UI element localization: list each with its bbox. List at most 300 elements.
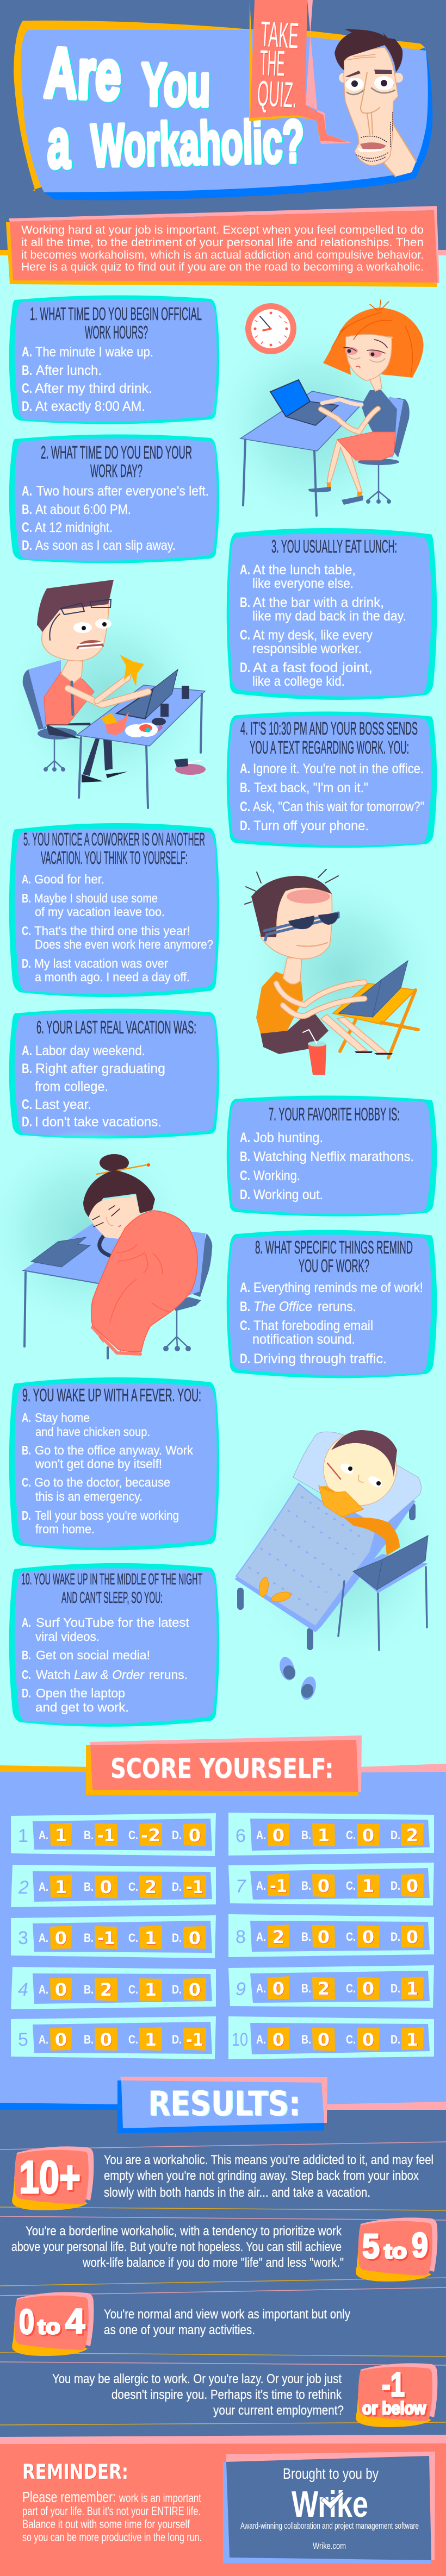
take the quiz tab: TAKE (259, 14, 300, 56)
score row 3: D. (172, 1931, 182, 1945)
score row 3: -1 (97, 1928, 115, 1948)
score row 3: C. (128, 1931, 138, 1945)
reminder heading: REMINDER: (22, 2460, 128, 2484)
sponsor panel (223, 2452, 435, 2564)
answers: A. (22, 1043, 32, 1058)
answers: That foreboding email (253, 1318, 373, 1333)
take the quiz tab (249, 0, 351, 144)
score row 6: 0 (362, 1825, 374, 1846)
badge text: 5 (362, 2227, 380, 2266)
answers: The minute I wake up. (35, 344, 153, 360)
intro panel (6, 206, 439, 287)
result text (104, 2307, 350, 2337)
badge text: to (384, 2240, 407, 2263)
score row 6: 6 (236, 1826, 246, 1846)
answers: Working out. (253, 1187, 323, 1202)
answers: C. (22, 520, 32, 535)
answers: That's the third one this year! (34, 924, 190, 938)
answers: Everything reminds me of work! (253, 1280, 423, 1295)
score row 10: 0 (272, 2029, 284, 2050)
answers: B. (22, 502, 32, 517)
heading (41, 442, 192, 481)
url: Wrike.com (313, 2541, 346, 2551)
answers: Law & Order (74, 1668, 145, 1682)
score row 8: D. (391, 1930, 400, 1944)
score row 3: 3 (18, 1928, 28, 1948)
answers: B. (240, 1149, 250, 1164)
badge text (362, 2366, 426, 2418)
score row 7: B. (301, 1879, 311, 1892)
badge text: 10+ (19, 2152, 80, 2203)
score row 2: A. (39, 1880, 48, 1894)
answers: B. (22, 891, 31, 905)
laptop (270, 380, 338, 425)
answers: Good for her. (34, 872, 104, 886)
result text: You're a borderline workaholic, with a tendency to prioritize work (26, 2224, 342, 2239)
score row 8 (228, 1914, 434, 1957)
answers (240, 761, 424, 833)
score row 9: 1 (406, 1978, 418, 1999)
result text: You're normal and view work as important but only (104, 2307, 350, 2322)
reminder text: part of your life. But it's not your ENTIRE life. (22, 2504, 201, 2518)
badge (12, 2292, 94, 2356)
socks (258, 1577, 292, 1603)
desk (77, 685, 205, 808)
result text (52, 2372, 344, 2418)
score row 4: C. (128, 1983, 138, 1996)
laptop (338, 961, 408, 1017)
take the quiz tab: QUIZ. (256, 73, 298, 115)
question 8 panel (227, 1230, 437, 1378)
brought to you by: Brought to you by (283, 2465, 379, 2482)
score row 3 (11, 1915, 216, 1958)
results heading (117, 2077, 327, 2133)
answers: D. (22, 399, 32, 414)
answers: viral videos. (35, 1629, 100, 1644)
score row 5: 0 (100, 2029, 112, 2050)
score row 1: -1 (97, 1825, 115, 1846)
score row 6: B. (301, 1828, 311, 1842)
answers: C. (22, 924, 31, 938)
badge text: 9 (412, 2226, 428, 2265)
answers (22, 344, 153, 414)
answers: won't get done by itself! (35, 1457, 162, 1471)
answers: Ignore it. You're not in the office. (253, 761, 424, 776)
badge text: to (38, 2316, 60, 2339)
bed frame (234, 1483, 416, 1647)
illustration: woman asleep at desk under shawl (0, 1129, 212, 1358)
answers (22, 484, 209, 553)
score row 10: B. (301, 2033, 311, 2046)
answers: Two hours after everyone's left. (36, 484, 209, 499)
score row 3: B. (84, 1931, 94, 1945)
score row 9: C. (346, 1982, 356, 1995)
reminder text (22, 2489, 202, 2544)
score row 7: 7 (236, 1876, 246, 1897)
answers: After my third drink. (35, 381, 152, 396)
score row 9: 9 (236, 1979, 246, 2000)
score row 4: 2 (100, 1979, 112, 2000)
score row 5: D. (172, 2033, 182, 2046)
intro text: Working hard at your job is important. Except when you feel compelled to do (21, 223, 424, 236)
answers: A. (22, 1615, 31, 1629)
answers: As soon as I can slip away. (35, 538, 176, 553)
score row 2 (11, 1865, 216, 1907)
title (43, 33, 305, 183)
heading: AND CAN'T SLEEP, SO YOU: (61, 1589, 163, 1607)
score row 9: 2 (318, 1978, 330, 1999)
answers: A. (22, 484, 32, 499)
score row 10: 0 (362, 2029, 374, 2050)
question 5 panel (9, 823, 219, 997)
shawl (91, 1211, 197, 1356)
heading (21, 1571, 202, 1607)
score row 6: A. (256, 1828, 266, 1842)
answers: D. (240, 660, 250, 675)
shirt (44, 672, 94, 724)
reminder text: so you can be more productive in the long run. (22, 2530, 202, 2544)
question 5 panel: VACATION. YOU THINK TO YOURSELF: (41, 848, 188, 868)
score row 10: D. (391, 2033, 400, 2046)
vest (256, 972, 303, 1033)
take the quiz tab: THE (259, 42, 286, 84)
illustration: clock and tired woman at desk (209, 300, 423, 527)
score row 8: C. (346, 1930, 356, 1944)
answers: C. (240, 628, 250, 643)
title: Are (43, 33, 122, 115)
answers: My last vacation was over (34, 956, 168, 970)
head and arms (37, 580, 148, 714)
result text: doesn't inspire you. Perhaps it's time to rethink (112, 2387, 342, 2402)
answers: I don't take vacations. (35, 1114, 162, 1130)
result text (104, 2153, 433, 2200)
answers: D. (240, 818, 250, 833)
score row 1: A. (39, 1828, 48, 1842)
score row 8: 0 (406, 1927, 418, 1947)
answers: reruns. (318, 1299, 356, 1314)
score row 6: D. (391, 1828, 400, 1842)
heading: 1. WHAT TIME DO YOU BEGIN OFFICIAL (30, 304, 202, 324)
text: 5. YOU NOTICE A COWORKER IS ON ANOTHER (23, 829, 205, 849)
heading: 6. YOUR LAST REAL VACATION WAS: (36, 1017, 196, 1037)
question 9 panel (9, 1377, 219, 1550)
answers: At the lunch table, (253, 562, 356, 578)
legs (46, 723, 128, 782)
answers: C. (22, 1475, 31, 1489)
score row 10: A. (256, 2033, 266, 2046)
answers: Working. (253, 1168, 300, 1183)
head (313, 1421, 407, 1516)
question 3 panel (227, 528, 437, 700)
answers: Go to the doctor, because (34, 1475, 170, 1489)
heading: 9. YOU WAKE UP WITH A FEVER. YOU: (22, 1385, 201, 1405)
intro text (21, 223, 424, 273)
heading: 2. WHAT TIME DO YOU END YOUR (41, 442, 192, 462)
answers: A. (22, 344, 32, 360)
closed laptop (31, 1237, 90, 1267)
title: You (141, 51, 211, 119)
answers (22, 872, 213, 984)
illustration: tired man's head (334, 29, 416, 177)
answers: D. (22, 956, 31, 970)
answers: At 12 midnight. (35, 520, 113, 535)
answers: D. (22, 1508, 31, 1522)
scarf (319, 1486, 400, 1556)
blanket (236, 1483, 375, 1626)
answers: Stay home (35, 1411, 90, 1425)
heading (240, 718, 418, 757)
score row 5: -1 (186, 2029, 203, 2050)
score row 1: 1 (18, 1826, 28, 1846)
score row 10: 0 (318, 2029, 330, 2050)
score row 2: -1 (186, 1877, 203, 1897)
heading: WORK HOURS? (85, 322, 148, 342)
answers: Labor day weekend. (35, 1043, 145, 1058)
head, arms, drink (245, 869, 364, 1075)
answers: notification sound. (252, 1332, 355, 1347)
question 6 panel (9, 1008, 219, 1138)
badge (356, 2363, 437, 2427)
badge text (19, 2302, 85, 2341)
answers: At the bar with a drink, (253, 595, 384, 610)
answers: D. (240, 1187, 250, 1202)
score row 10: 10 (232, 2029, 248, 2050)
score row 9: 0 (272, 1978, 284, 1999)
answers: from college. (35, 1079, 108, 1094)
answers: like everyone else. (252, 576, 354, 591)
score row 4: 0 (189, 1979, 201, 2000)
score row 2: 1 (55, 1877, 67, 1897)
heading (30, 304, 202, 342)
woman (308, 300, 423, 505)
score row 1: B. (84, 1828, 94, 1842)
answers: C. (22, 381, 32, 396)
pillow (293, 1432, 421, 1528)
answers: B. (22, 363, 32, 378)
result: 10 plus (12, 2146, 433, 2210)
score row 2: C. (128, 1880, 138, 1894)
score row 1: D. (172, 1828, 182, 1842)
score row 7: 0 (406, 1876, 418, 1896)
score row 4: D. (172, 1983, 182, 1996)
illustration: sunburned man working on vacation (241, 869, 442, 1075)
answers: reruns. (149, 1668, 188, 1682)
score row 2: 2 (18, 1877, 29, 1898)
result: 5 to 9 (11, 2217, 437, 2282)
header speech bubble (14, 21, 432, 200)
answers: B. (240, 1299, 250, 1314)
score row 3: 1 (145, 1928, 157, 1948)
question 10 panel: 10. YOU WAKE UP IN THE MIDDLE OF THE NIGHT (21, 1571, 202, 1588)
answers: of my vacation leave too. (35, 905, 165, 919)
score yourself heading (86, 1735, 362, 1796)
sleeping face (89, 1195, 140, 1239)
score row 8: 0 (318, 1927, 330, 1947)
answers: A. (240, 761, 250, 776)
heading (23, 829, 205, 868)
answers: A. (22, 1411, 31, 1425)
answers: A. (240, 1130, 250, 1145)
answers: C. (240, 1318, 250, 1333)
score row 7: 0 (318, 1876, 330, 1896)
answers: Surf YouTube for the latest (36, 1615, 190, 1629)
score row 6 (228, 1813, 434, 1856)
question 4 panel (227, 712, 437, 848)
score row 7: 1 (362, 1876, 374, 1896)
result text: slowly with both hands in the air... and take a vacation. (104, 2185, 370, 2200)
answers: Watch (36, 1668, 71, 1682)
score row 3: 0 (189, 1928, 201, 1948)
hair and bun (83, 1154, 155, 1217)
score row 8: 8 (236, 1927, 246, 1947)
score row 5: 1 (145, 2029, 157, 2050)
answers: C. (22, 1668, 31, 1682)
score row 2: B. (84, 1880, 94, 1894)
score row 8: A. (256, 1930, 266, 1944)
question 1 panel (9, 295, 219, 424)
score row 9 (228, 1965, 434, 2008)
badge text: 4 (65, 2302, 85, 2341)
score row 2: D. (172, 1880, 182, 1894)
score row 6: 0 (272, 1825, 284, 1846)
score row 5: A. (39, 2033, 48, 2046)
score row 4: B. (84, 1983, 94, 1996)
score row 5: C. (128, 2033, 138, 2046)
icon: wall clock (245, 303, 296, 354)
answers (240, 1130, 414, 1202)
desk (240, 391, 364, 516)
score row 2: 2 (145, 1877, 157, 1897)
score row 7: A. (256, 1879, 266, 1892)
reminder text: Please remember: (22, 2489, 116, 2505)
answers: D. (240, 1351, 250, 1367)
score row 1: -2 (141, 1825, 160, 1846)
answers: A. (240, 1280, 250, 1295)
answers: B. (22, 1648, 31, 1662)
score row 4: A. (39, 1983, 48, 1996)
intro text: it all the time, to the detriment of your personal life and relationships. Then (21, 236, 424, 249)
score yourself heading: SCORE YOURSELF: (110, 1753, 333, 1784)
answers: C. (240, 1168, 250, 1183)
result: 0 to 4 (12, 2292, 350, 2356)
answers (240, 562, 406, 689)
reminder text: work is an important (119, 2491, 201, 2505)
score row 1: 1 (55, 1825, 67, 1846)
score row 7: -1 (270, 1876, 287, 1896)
lunch items on desk (101, 686, 189, 737)
score row 9: B. (301, 1982, 311, 1995)
score row 5: B. (84, 2033, 94, 2046)
score row 9: D. (391, 1982, 400, 1995)
desk and chair (23, 1224, 212, 1358)
answers: this is an emergency. (35, 1489, 143, 1503)
illustration: sick man in bed with laptop (234, 1421, 446, 1702)
badge (356, 2217, 437, 2282)
answers: A. (22, 872, 31, 886)
score row 6: 2 (406, 1825, 418, 1846)
answers: D. (22, 1114, 32, 1130)
answers: Maybe I should use some (34, 891, 158, 905)
result divider lines (0, 2142, 446, 2425)
answers: At a fast food joint, (253, 660, 373, 675)
answers: C. (240, 799, 250, 814)
score row 6: C. (346, 1828, 356, 1842)
answers: At my desk, like every (253, 628, 373, 643)
score row 5 (11, 2016, 216, 2059)
answers: Get on social media! (36, 1648, 150, 1662)
answers: Does she even work here anymore? (35, 937, 213, 951)
answers: Last year. (35, 1097, 91, 1112)
score row 4: 1 (145, 1979, 157, 2000)
score row 1 (11, 1813, 216, 1856)
spilled cup (174, 759, 206, 775)
answers (22, 1615, 190, 1714)
score row 9: 0 (362, 1978, 374, 1999)
result text: above your personal life. But you're not hopeless. You can still achieve (11, 2240, 342, 2254)
answers: B. (22, 1443, 31, 1457)
score row 7: D. (391, 1879, 400, 1892)
score row 9: A. (256, 1982, 266, 1995)
score row 10 (228, 2016, 434, 2059)
title: Workaholic? (90, 108, 305, 179)
heading: YOU OF WORK? (299, 1256, 369, 1276)
score row 4: 4 (18, 1979, 28, 2000)
score row 6: 1 (318, 1825, 330, 1846)
intro text: it becomes workaholism, which is an actual addiction and compulsive behavior. (21, 248, 424, 261)
intro text: Here is a quick quiz to find out if you are on the road to becoming a workaholic. (21, 260, 424, 273)
answers: Text back, "I'm on it." (254, 780, 368, 795)
answers: a month ago. I need a day off. (35, 970, 190, 984)
reminder text: Balance it out with some time for yourself (22, 2517, 190, 2531)
chair (358, 397, 410, 504)
score row 8: 0 (362, 1927, 374, 1947)
answers: D. (22, 1686, 31, 1700)
answers: C. (22, 1097, 32, 1112)
heading: WORK DAY? (90, 461, 143, 481)
question 2 panel (9, 434, 219, 563)
folding table (333, 983, 418, 1058)
badge text: -1 (382, 2366, 405, 2404)
answers: Open the laptop (36, 1686, 125, 1700)
answers: Turn off your phone. (253, 818, 369, 833)
result text (11, 2224, 344, 2270)
score row 7 (228, 1863, 434, 1906)
answers (240, 1280, 423, 1367)
answers: At exactly 8:00 AM. (35, 399, 145, 414)
answers: Tell your boss you're working (35, 1508, 179, 1522)
result text: work-life balance if you do more "life" and less "work." (82, 2255, 344, 2270)
score row 8: 2 (272, 1927, 284, 1947)
bedside table and laptop (338, 1535, 428, 1650)
badge text: 0 (19, 2302, 34, 2341)
result: minus 1 or below (52, 2363, 437, 2427)
answers: Driving through traffic. (253, 1351, 387, 1367)
answers: D. (22, 538, 32, 553)
result text: your current employment? (213, 2403, 344, 2418)
heading (255, 1237, 413, 1276)
answers: Go to the office anyway. Work (35, 1443, 193, 1457)
badge text: or below (362, 2398, 426, 2418)
score row 3: A. (39, 1931, 48, 1945)
logo: wrike: Wrike (292, 2484, 368, 2525)
badge (12, 2146, 94, 2210)
score row 7: C. (346, 1879, 356, 1892)
question 7 panel (227, 1095, 437, 1217)
score row 4: 0 (55, 1979, 67, 2000)
answers: At about 6:00 PM. (35, 502, 131, 517)
score row 8: B. (301, 1930, 311, 1944)
laptop (116, 669, 178, 719)
